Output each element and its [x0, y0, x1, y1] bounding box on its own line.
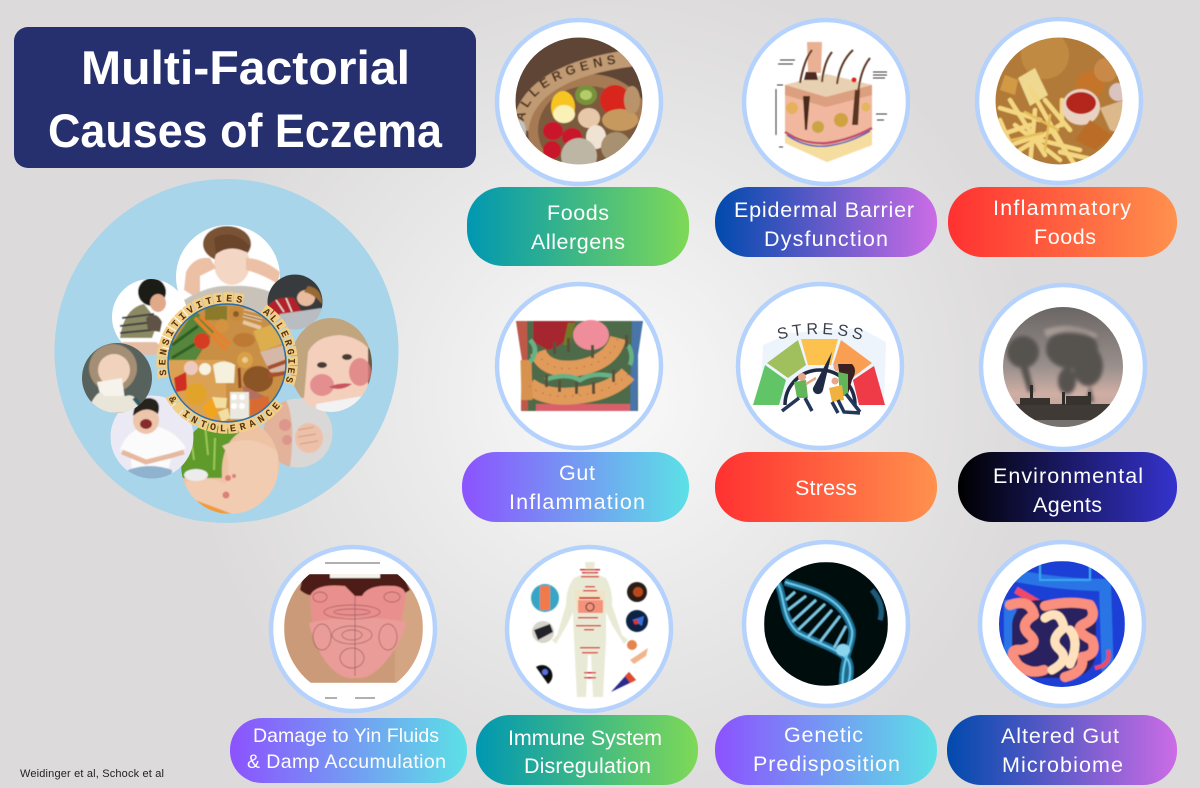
- pill: Environmental Agents: Environmental: [993, 464, 1143, 488]
- pill: Immune System Disregulation: [476, 715, 698, 785]
- tiles: ALLERGIES: ALLERGIES: [262, 308, 295, 383]
- icon ring: glowing intestines: [980, 542, 1144, 706]
- pill: Inflammatory Foods: Foods: [1034, 225, 1096, 249]
- pill: Genetic Predisposition: Predisposition: [753, 752, 900, 776]
- pill: Altered Gut Microbiome: Altered Gut: [1001, 724, 1119, 748]
- icon ring: allergens food bowl: ALLERGENS: [516, 54, 616, 122]
- pill: Epidermal Barrier Dysfunction: Epidermal Barrier: [734, 198, 914, 222]
- icon ring: factory smoke: [981, 285, 1145, 449]
- panel: altered gut microbiome: [947, 542, 1177, 785]
- pill: Genetic Predisposition: [715, 715, 937, 785]
- photo: sneezing girl: [80, 342, 154, 414]
- pill: Damage to Yin Fluids & Damp Accumulation: & Damp Accumulation: [247, 751, 446, 773]
- food plate: [168, 304, 286, 422]
- pill: Stress: [715, 452, 937, 522]
- pill: Environmental Agents: Agents: [1033, 493, 1102, 517]
- pill: Stress: Stress: [795, 476, 857, 500]
- figures pushing the needle: [782, 362, 860, 413]
- icon ring: stress gauge: [736, 282, 904, 450]
- wheel: food and lettered tiles: [156, 292, 298, 434]
- icon ring: inflamed intestines: [497, 284, 661, 448]
- pill: Foods Allergens: Allergens: [531, 230, 625, 254]
- pill: Epidermal Barrier Dysfunction: [715, 187, 937, 257]
- icon ring: allergens food bowl: [494, 18, 664, 186]
- photo: sleeping child: [266, 274, 324, 330]
- panel: environmental agents: [958, 285, 1177, 522]
- pill: Damage to Yin Fluids & Damp Accumulation: [230, 718, 467, 783]
- pill: Foods Allergens: Foods: [547, 201, 609, 225]
- panel: gut inflammation: [462, 284, 689, 522]
- pill: Genetic Predisposition: Genetic: [784, 723, 863, 747]
- panel: immune system disregulation: [476, 547, 698, 785]
- photo: scratching arm: [263, 398, 333, 468]
- panel: damage to yin fluids and damp accumulation: [230, 547, 467, 783]
- tiles: SENSITIVITIES: SENSITIVITIES: [158, 294, 242, 376]
- pill: Altered Gut Microbiome: [947, 715, 1177, 785]
- pill: Altered Gut Microbiome: Microbiome: [1002, 753, 1123, 777]
- icon ring: skin cross-section: [744, 20, 908, 184]
- photo: girl covering ears: [176, 225, 280, 314]
- panel: stress: [715, 282, 937, 522]
- panel: inflammatory foods: [948, 19, 1177, 257]
- pill: Immune System Disregulation: Disregulation: [524, 754, 651, 778]
- title: Causes of Eczema: [48, 104, 443, 157]
- pill: Gut Inflammation: Gut: [559, 461, 595, 485]
- body silhouette with red labels: [552, 562, 628, 697]
- pill: Immune System Disregulation: Immune System: [508, 726, 662, 750]
- photo: boy coughing: [110, 278, 190, 358]
- citation: Weidinger et al, Schock et al: [20, 768, 164, 780]
- photo: baby with red cheeks: [288, 316, 374, 414]
- panel: genetic predisposition: [715, 542, 937, 785]
- pill: Damage to Yin Fluids & Damp Accumulation: Damage to Yin Fluids: [253, 725, 439, 747]
- icon ring: body with autoimmune diseases: [507, 547, 671, 711]
- panel: foods allergens: [467, 18, 689, 266]
- icon ring: tongue diagram: [271, 547, 435, 711]
- panel: epidermal barrier dysfunction: [715, 20, 937, 257]
- pill: Foods Allergens: [467, 187, 689, 266]
- pill: Environmental Agents: [958, 452, 1177, 522]
- pill: Epidermal Barrier Dysfunction: Dysfunction: [764, 227, 888, 251]
- icon ring: DNA helix: [744, 542, 908, 706]
- pill: Inflammatory Foods: [948, 187, 1177, 257]
- surrounding disease icons: [531, 582, 648, 692]
- icon ring: fried food: [977, 19, 1141, 183]
- photo: arm with rash on grass: [180, 415, 280, 515]
- icon ring: stress gauge: STRESS: [778, 323, 863, 340]
- photo: crying boy: [110, 395, 194, 480]
- title: Multi-Factorial: [81, 41, 410, 94]
- title: [14, 27, 476, 168]
- tiles: & INTOLERANCE: & INTOLERANCE: [169, 396, 280, 432]
- pill: Gut Inflammation: [462, 452, 689, 522]
- pill: Gut Inflammation: Inflammation: [509, 490, 645, 514]
- panel: children with sensitivities collage: [54, 179, 398, 523]
- pill: Inflammatory Foods: Inflammatory: [993, 196, 1131, 220]
